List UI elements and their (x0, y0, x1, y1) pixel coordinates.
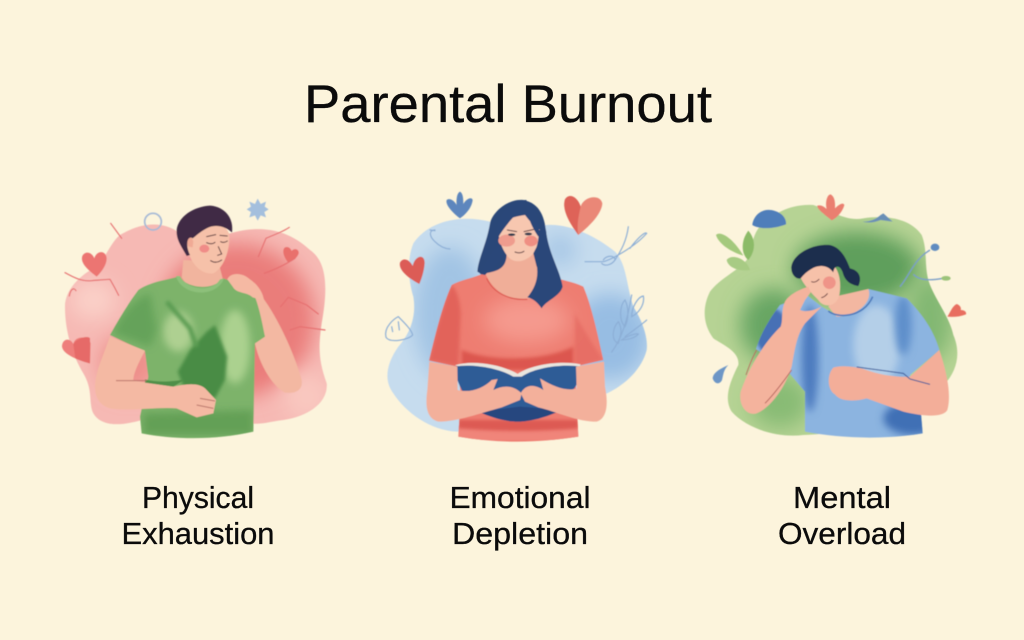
blue ring and star (145, 199, 269, 230)
green watercolor blob (705, 205, 957, 436)
label: physical exhaustion (122, 480, 274, 551)
head and hair (177, 206, 232, 273)
illustration: emotional depletion figure (386, 192, 650, 442)
neck (828, 289, 869, 317)
label: mental overload: Overload (778, 516, 906, 551)
label: physical exhaustion: Exhaustion (122, 516, 274, 551)
green shirt (110, 276, 265, 438)
neck (483, 253, 553, 301)
red hearts and squiggles (62, 223, 325, 363)
right arm (253, 293, 302, 393)
dark blue back hair (477, 200, 549, 280)
hand on shoulder (227, 274, 264, 301)
arms and hands holding book (426, 362, 607, 422)
title: Parental Burnout (304, 75, 712, 134)
label: emotional depletion (450, 480, 590, 551)
blue book (454, 363, 581, 422)
red shirt (429, 273, 603, 442)
front hair (480, 200, 563, 308)
face (498, 215, 541, 261)
left arm and hand on belly (95, 337, 216, 417)
blue watercolor blob (387, 219, 650, 432)
neck (182, 260, 223, 289)
label: mental overload (778, 480, 906, 551)
blue leaf and line icons (386, 192, 647, 352)
label: physical exhaustion: Physical (142, 480, 254, 515)
label: emotional depletion: Depletion (452, 516, 588, 551)
blue shirt (755, 289, 943, 438)
leaves and accent icons (713, 194, 966, 383)
hearts (400, 196, 602, 284)
head and hair (791, 245, 860, 305)
label: mental overload: Mental (793, 480, 891, 515)
right arm with fist on chest (829, 350, 949, 416)
red watercolor blob (65, 225, 330, 424)
illustration: physical exhaustion figure (62, 199, 330, 438)
label: emotional depletion: Emotional (450, 480, 590, 515)
shirt collar line (828, 297, 873, 315)
illustration: mental overload figure (705, 194, 966, 438)
left arm and hand at temple (740, 287, 822, 414)
